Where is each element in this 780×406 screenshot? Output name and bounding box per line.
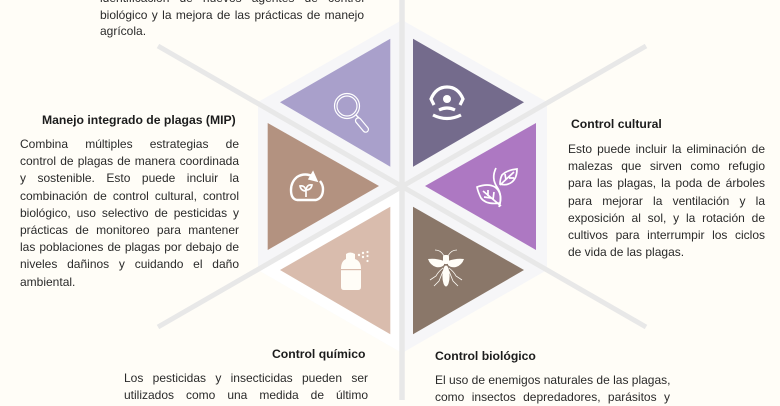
text block: MIP description: biológico, uso selectivo de pesticidas y bbox=[20, 206, 239, 220]
text block: MIP description: ambiental. bbox=[20, 274, 75, 288]
text block: MIP description: niveles dañinos y cuidando el daño bbox=[20, 257, 239, 271]
icon: mosquito bbox=[428, 250, 464, 286]
text block: chemical description bbox=[124, 371, 368, 402]
text block: MIP description: prácticas de monitoreo para mantener bbox=[20, 223, 239, 237]
text block: chemical description: utilizados como una medida de último bbox=[124, 388, 368, 402]
triangle: right bbox=[425, 123, 536, 250]
text block: cultural description bbox=[568, 142, 766, 259]
text block: cultural description: cultivos para interrumpir los ciclos bbox=[568, 228, 765, 242]
text block: chemical description: Los pesticidas y insecticidas pueden ser bbox=[124, 371, 368, 385]
text block: cultural description: exposición al sol, y la rotación de bbox=[568, 211, 765, 225]
text block: cultural description: Esto puede incluir la eliminación de bbox=[568, 142, 765, 156]
white band: bottom left sector bbox=[258, 186, 402, 353]
diagonal and vertical spokes bbox=[158, 0, 646, 400]
text block: MIP description: y sostenible. Esto puede incluir la bbox=[20, 171, 239, 185]
text block: MIP description bbox=[20, 137, 240, 288]
text block: top paragraph bbox=[100, 0, 364, 38]
text block: cultural description: para las plagas, la poda de árboles bbox=[568, 176, 765, 190]
triangle: top left bbox=[280, 39, 390, 167]
heading: Manejo integrado de plagas (MIP): Manejo integrado de plagas (MIP) bbox=[42, 113, 236, 127]
text block: MIP description: control de plagas de manera coordinada bbox=[20, 154, 239, 168]
text block: cultural description: malezas que sirven como refugio bbox=[568, 159, 765, 173]
text block: cultural description: para mejorar la ventilación y la bbox=[568, 194, 765, 208]
icon: eye with person bbox=[431, 87, 463, 118]
icon: magnifying glass bbox=[334, 94, 370, 133]
icon: leaves bbox=[477, 168, 517, 207]
text block: top paragraph: biológico y la mejora de las prácticas de manejo bbox=[100, 8, 364, 22]
text block: MIP description: Combina múltiples estrategias de bbox=[20, 137, 239, 151]
hexagon backing bbox=[258, 20, 547, 353]
text block: biological description bbox=[435, 373, 670, 404]
text block: MIP description: las poblaciones de plagas por debajo de bbox=[20, 240, 239, 254]
triangle: bottom right bbox=[413, 207, 524, 334]
text block: top paragraph: agrícola. bbox=[100, 24, 146, 38]
triangle: left bbox=[268, 123, 379, 250]
text block: MIP description: combinación de control cultural, control bbox=[20, 189, 239, 203]
icon: spray can bbox=[341, 251, 369, 290]
text block: biological description: El uso de enemigos naturales de las plagas, bbox=[435, 373, 670, 387]
heading: Control biológico: Control biológico bbox=[435, 349, 536, 363]
text block: cultural description: de vida de las plagas. bbox=[568, 245, 684, 259]
triangle: bottom left bbox=[280, 207, 390, 334]
heading: Control químico: Control químico bbox=[272, 347, 365, 361]
icon: recycling plant bbox=[291, 172, 323, 200]
triangle: top right bbox=[413, 39, 524, 167]
text block: biological description: como insectos depredadores, parásitos y bbox=[435, 390, 670, 404]
heading: Control cultural: Control cultural bbox=[571, 117, 662, 131]
